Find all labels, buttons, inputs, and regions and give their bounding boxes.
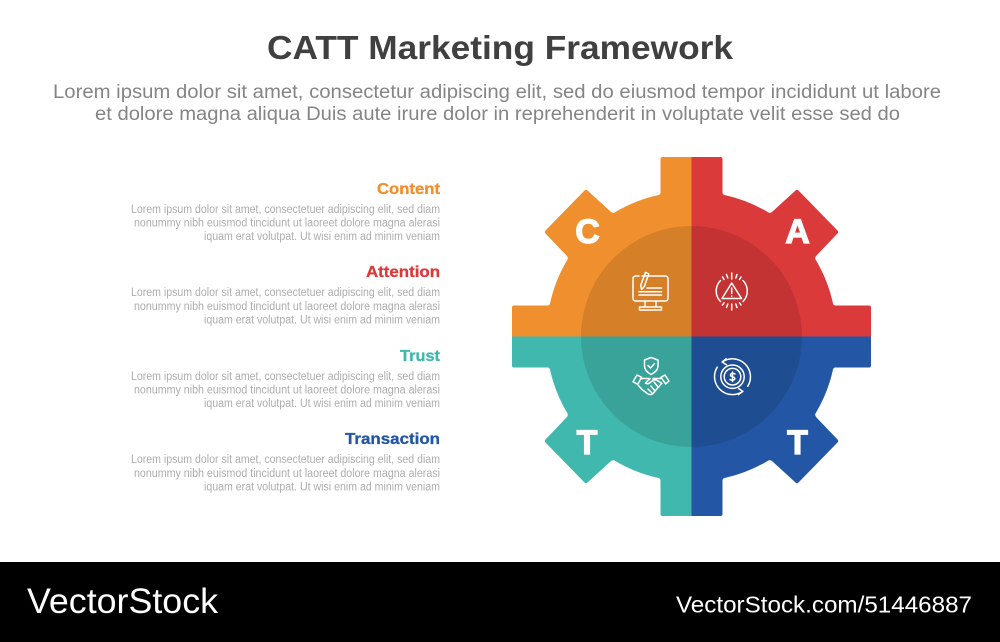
text block: Trust: Trust (400, 348, 440, 365)
text block: Trust: Lorem ipsum dolor sit amet, consectetuer adipiscing elit, sed diam (131, 371, 440, 383)
text block: Transaction: nonummy nibh euismod tincidunt ut laoreet dolore magna alerasi (134, 468, 440, 480)
text block: Content: Lorem ipsum dolor sit amet, consectetuer adipiscing elit, sed diam (131, 204, 440, 216)
gear diagram (512, 157, 871, 516)
text block: Content (131, 181, 440, 243)
text block: Attention: nonummy nibh euismod tincidunt ut laoreet dolore magna alerasi (134, 301, 440, 313)
letter T left: T (577, 424, 598, 462)
text block: Transaction (131, 431, 440, 494)
letter A: A (785, 213, 810, 251)
text block: Attention: Attention (366, 264, 440, 281)
gear quadrant: Content (512, 157, 692, 336)
text block: Transaction: Transaction (345, 431, 440, 448)
text block: Attention: Lorem ipsum dolor sit amet, consectetuer adipiscing elit, sed diam (131, 287, 440, 299)
text block: Trust (131, 348, 440, 410)
footer bar (0, 562, 1000, 642)
icon: dollar cycle (715, 359, 750, 395)
letter T right: T (787, 424, 808, 462)
subtitle text: Lorem ipsum dolor sit amet, consectetur adipiscing elit, sed do eiusmod tempor incididunt ut labore (53, 82, 941, 103)
footer image id: VectorStock.com/51446887 (676, 592, 972, 618)
title: CATT Marketing Framework (267, 29, 734, 66)
icon: warning alert (716, 273, 747, 310)
text block: Transaction: iquam erat volutpat. Ut wisi enim ad minim veniam (204, 482, 440, 494)
subtitle text: et dolore magna aliqua Duis aute irure dolor in reprehenderit in voluptate velit esse sed do (95, 104, 900, 125)
text block: Trust: iquam erat volutpat. Ut wisi enim ad minim veniam (204, 398, 440, 410)
footer logo: VectorStock (27, 582, 219, 621)
inner dark circle (581, 226, 802, 447)
text block: Content: nonummy nibh euismod tincidunt ut laoreet dolore magna alerasi (134, 218, 440, 230)
text block: Trust: nonummy nibh euismod tincidunt ut laoreet dolore magna alerasi (134, 384, 440, 396)
text block: Content: iquam erat volutpat. Ut wisi enim ad minim veniam (204, 231, 440, 243)
text block: Content: Content (377, 181, 440, 198)
text block: Attention (131, 264, 440, 326)
gear quadrant: Transaction (692, 336, 871, 516)
subtitle text (53, 82, 941, 125)
gear quadrant: Attention (692, 157, 871, 336)
text block: Attention: iquam erat volutpat. Ut wisi enim ad minim veniam (204, 314, 440, 326)
icon: handshake with shield (633, 358, 669, 395)
gear quadrant: Trust (512, 336, 692, 516)
letter C: C (575, 213, 600, 251)
icon: monitor with pen (633, 272, 668, 310)
text block: Transaction: Lorem ipsum dolor sit amet, consectetuer adipiscing elit, sed diam (131, 454, 440, 466)
